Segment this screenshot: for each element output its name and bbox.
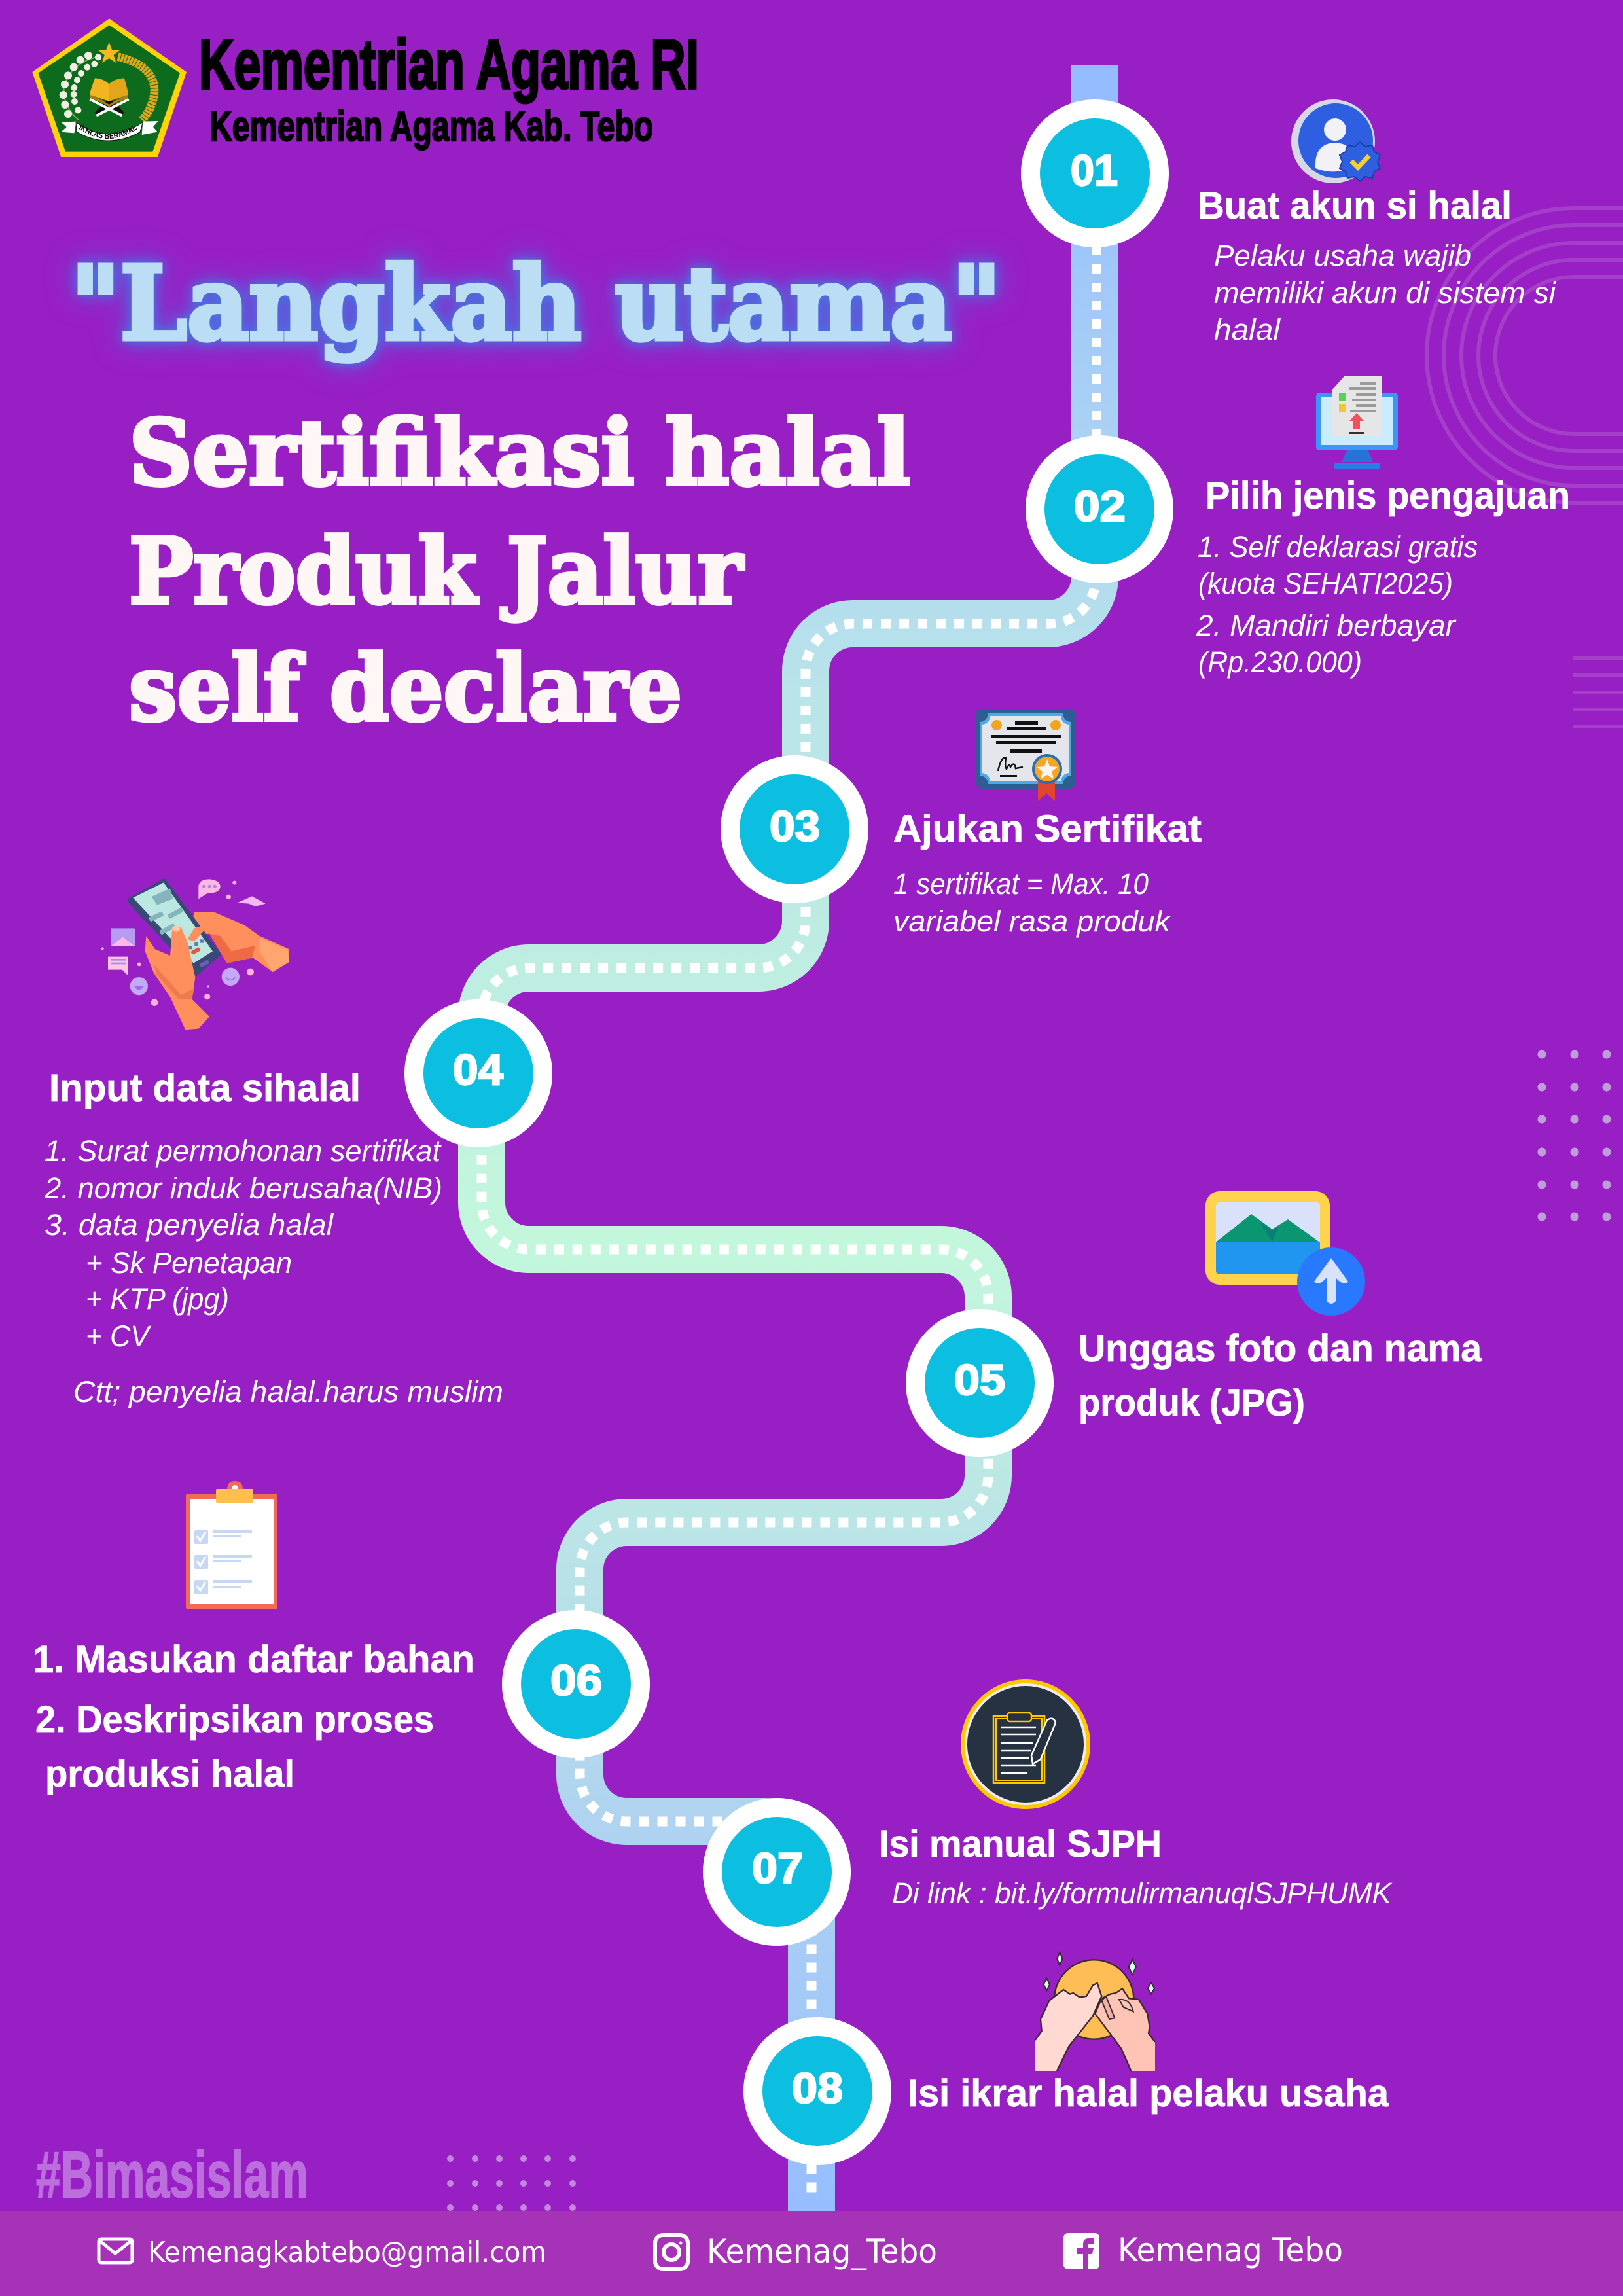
step 04 marker: 04 — [453, 1045, 503, 1094]
step 04 text: 3. data penyelia halal — [45, 1208, 334, 1242]
step 02 text: (kuota SEHATI2025) — [1198, 567, 1453, 600]
step 05 text — [1079, 1327, 1482, 1424]
header: ministry name: Kementrian Agama RI — [199, 25, 699, 103]
decoration: short stripes right edge — [1573, 658, 1623, 726]
step 08 marker — [743, 2017, 891, 2165]
step 04 marker — [404, 999, 552, 1147]
icon: verified user — [1291, 99, 1380, 183]
step 04 text: 1. Surat permohonan sertifikat — [45, 1134, 442, 1168]
step 03 text: 1 sertifikat = Max. 10 — [893, 867, 1149, 901]
step 04 text: Input data sihalal — [49, 1067, 361, 1109]
step 04 text: + CV — [86, 1319, 152, 1353]
step 02 text: Pilih jenis pengajuan — [1205, 475, 1570, 517]
title: main heading: self declare — [129, 635, 682, 742]
step 08 marker: 08 — [792, 2064, 843, 2112]
step 01 text — [1198, 185, 1557, 346]
step 05 text: Unggas foto dan nama — [1079, 1327, 1482, 1370]
step 07 text: Di link : bit.ly/formulirmanuqlSJPHUMK — [892, 1876, 1393, 1910]
header: ministry name — [199, 25, 699, 150]
step 04 text: + Sk Penetapan — [86, 1246, 292, 1280]
step 07 text: Isi manual SJPH — [879, 1823, 1162, 1865]
step 02 text: (Rp.230.000) — [1198, 645, 1362, 679]
icon: round manual form — [961, 1679, 1090, 1809]
logo: Kementerian Agama emblem: IKHLAS BERAMAL — [79, 124, 137, 139]
step 06 text: produksi halal — [45, 1753, 294, 1795]
step 04 text — [44, 1067, 503, 1408]
step 03 text: Ajukan Sertifikat — [893, 808, 1202, 850]
step 03 marker: 03 — [770, 802, 820, 850]
step 04 text: + KTP (jpg) — [86, 1282, 229, 1316]
step 01 marker: 01 — [1071, 146, 1118, 194]
icon: facebook — [1063, 2233, 1099, 2269]
step 06 text — [33, 1638, 474, 1795]
title: Langkah utama: "Langkah utama" — [71, 243, 1001, 363]
step 07 marker — [703, 1798, 851, 1946]
step 07 text — [879, 1823, 1393, 1910]
step 01 text: halal — [1214, 313, 1281, 346]
decoration: dot grid bottom — [447, 2155, 576, 2211]
step 04 text: 2. nomor induk berusaha(NIB) — [44, 1172, 442, 1205]
title: main heading: Sertifikasi halal — [129, 399, 910, 506]
logo: Kementerian Agama emblem — [32, 18, 187, 157]
step 02 marker: 02 — [1074, 482, 1126, 530]
footer instagram: Kemenag_Tebo — [707, 2233, 937, 2270]
footer bar — [0, 2211, 1623, 2296]
footer email: Kemenagkabtebo@gmail.com — [148, 2236, 546, 2269]
step 06 marker — [502, 1610, 650, 1758]
step 04 text: Ctt; penyelia halal.harus muslim — [73, 1375, 503, 1408]
icon: hands with phone — [101, 878, 289, 1030]
step 01 text: Pelaku usaha wajib — [1214, 239, 1471, 272]
winding road path — [482, 65, 1101, 2211]
step 01 text: Buat akun si halal — [1198, 185, 1512, 227]
icon: monitor with document — [1316, 376, 1398, 469]
step 03 marker — [721, 755, 868, 903]
hashtag: #Bimasislam — [36, 2138, 308, 2212]
step 05 text: produk (JPG) — [1079, 1382, 1305, 1424]
icon: photo upload — [1205, 1191, 1365, 1316]
step 02 marker — [1026, 435, 1173, 583]
step 01 text: memiliki akun di sistem si — [1214, 276, 1557, 310]
step 03 text — [893, 808, 1202, 938]
step 01 marker — [1021, 99, 1169, 247]
step 08 text: Isi ikrar halal pelaku usaha — [908, 2072, 1389, 2115]
step 06 text: 1. Masukan daftar bahan — [33, 1638, 474, 1681]
step 03 text: variabel rasa produk — [893, 905, 1172, 938]
icon: pinky promise hands — [1035, 1952, 1155, 2071]
decoration: dot grid right — [1538, 1050, 1611, 1221]
step 02 text — [1196, 475, 1570, 679]
step 07 marker: 07 — [752, 1844, 803, 1892]
title: main heading — [129, 399, 910, 742]
step 02 text: 2. Mandiri berbayar — [1196, 609, 1457, 642]
step 05 marker: 05 — [954, 1355, 1005, 1404]
icon: certificate — [975, 709, 1076, 801]
step 05 marker — [906, 1309, 1054, 1457]
footer facebook: Kemenag Tebo — [1118, 2231, 1343, 2269]
icon: checklist clipboard — [186, 1481, 277, 1609]
title: main heading: Produk Jalur — [129, 518, 744, 624]
step 06 marker: 06 — [550, 1656, 602, 1704]
decoration: concentric arcs top right — [1427, 208, 1623, 503]
icon: instagram — [655, 2235, 688, 2269]
header: regional office: Kementrian Agama Kab. Tebo — [209, 102, 653, 150]
step 02 text: 1. Self deklarasi gratis — [1198, 530, 1478, 564]
icon: email — [99, 2239, 132, 2263]
step 06 text: 2. Deskripsikan proses — [35, 1698, 434, 1741]
